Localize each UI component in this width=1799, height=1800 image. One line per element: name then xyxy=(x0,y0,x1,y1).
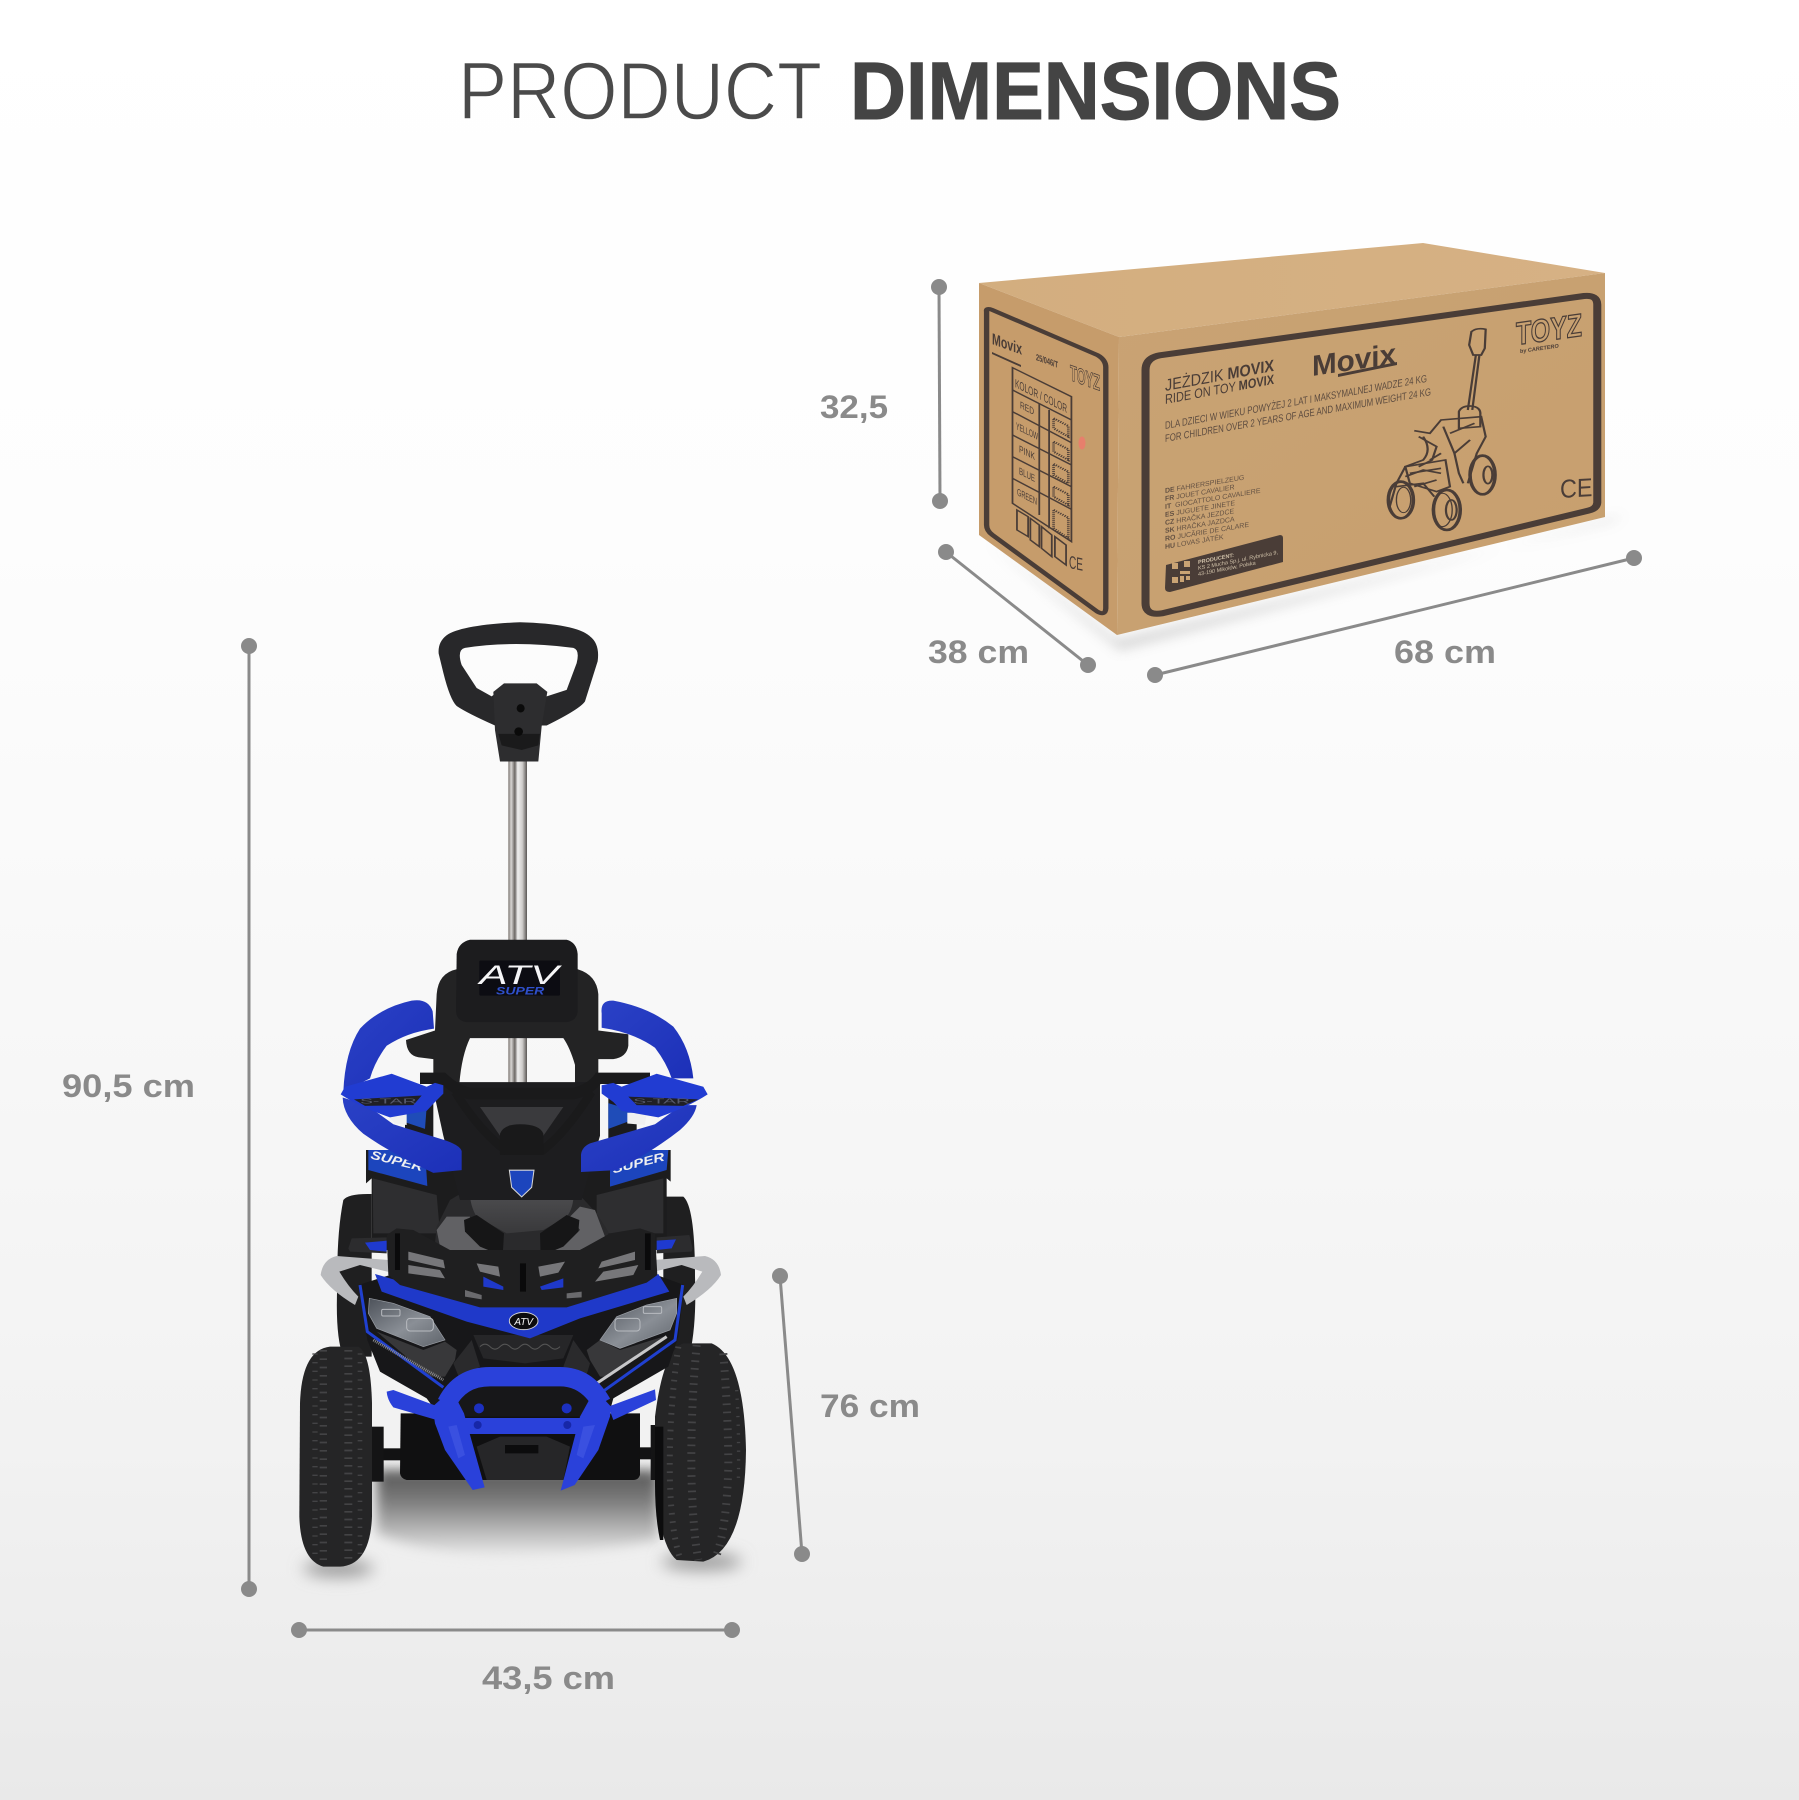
producer plate: 43-190 Mikołów, Polska xyxy=(1198,560,1257,578)
front cargo rack xyxy=(387,1228,657,1307)
seat back frame xyxy=(406,969,628,1084)
dimension: box depth line xyxy=(938,544,1096,673)
blue side trim xyxy=(360,1285,443,1387)
CE mark on box: CE xyxy=(1560,474,1593,504)
blue front bumper xyxy=(387,1377,656,1491)
box shadow xyxy=(985,515,1625,650)
languages list: FR JOUET CAVALIER xyxy=(1165,484,1235,503)
front label heading: FOR CHILDREN OVER 2 YEARS OF AGE AND MAXIMUM WEIGHT 24 KG xyxy=(1165,386,1431,445)
box top face xyxy=(979,243,1605,337)
left hand guard: S-TAR xyxy=(360,1097,417,1106)
central hood xyxy=(433,1150,610,1260)
left face colour table xyxy=(1012,368,1071,565)
ground shadow xyxy=(377,1470,658,1555)
red laser dot xyxy=(1078,436,1086,450)
producer plate xyxy=(1165,535,1283,592)
steel push pole xyxy=(508,761,527,1084)
centre console cap xyxy=(500,1124,543,1155)
rear body panels: SUPER xyxy=(369,1148,425,1174)
rear dark panels behind handlebars xyxy=(387,1082,647,1200)
title xyxy=(458,46,1341,137)
lower chassis xyxy=(372,1413,664,1482)
seat back pad xyxy=(456,940,578,1022)
Toyz logo on box: by CARETERO xyxy=(1520,343,1559,355)
silver side bars xyxy=(321,1235,721,1305)
dimension label: 68 cm: 68 cm xyxy=(1394,634,1496,670)
blue side arcs xyxy=(343,1000,697,1173)
front label heading xyxy=(1165,356,1431,445)
front wheels xyxy=(299,1343,746,1567)
grille xyxy=(473,1335,573,1363)
side label texts: Movix xyxy=(992,330,1023,359)
Toyz logo on box: TOYZ xyxy=(1516,307,1582,352)
right hand guard: S-TAR xyxy=(633,1097,690,1106)
panel: ride-on ATV lower body xyxy=(299,1148,746,1577)
languages list: ES JUGUETE JINETE xyxy=(1165,500,1235,519)
ATV badge xyxy=(509,1312,538,1330)
side label texts: TOYZ xyxy=(1070,360,1100,396)
dimension label: 38 cm: 38 cm xyxy=(928,634,1029,670)
left hand guard xyxy=(341,1074,443,1117)
line art ATV on box xyxy=(1388,329,1495,530)
producer plate: PRODUCENT: xyxy=(1198,553,1234,566)
dimension: box length line xyxy=(1147,550,1642,683)
blue hood band xyxy=(375,1274,669,1338)
dimension label: 32,5: 32,5 xyxy=(820,389,888,425)
languages list: CZ HRAČKA JEZDCE xyxy=(1165,506,1235,527)
dimension label: 90,5 cm: 90,5 cm xyxy=(62,1068,195,1104)
side label texts: KOLOR / COLOR xyxy=(1015,376,1067,416)
title: PRODUCT xyxy=(458,46,822,137)
languages list: DE FAHRERSPIELZEUG xyxy=(1165,475,1244,495)
Movix logo on box: Movix xyxy=(1312,339,1396,383)
panel: shipping box xyxy=(979,243,1625,650)
side label texts: PINK xyxy=(1019,444,1035,463)
rear body panels xyxy=(366,1148,671,1250)
languages list: RO JUCĂRIE DE CALARE xyxy=(1165,520,1249,543)
dimension label: 43,5 cm: 43,5 cm xyxy=(482,1660,615,1696)
dimension: total height line xyxy=(241,638,257,1597)
dimension: length line xyxy=(772,1268,810,1562)
side label texts: GREEN xyxy=(1017,487,1037,508)
front label heading: RIDE ON TOY MOVIX xyxy=(1165,372,1274,407)
side stickers xyxy=(368,1150,427,1186)
rear wheels xyxy=(337,1194,695,1357)
dimension: box height line xyxy=(931,279,948,509)
dimension label: 76 cm: 76 cm xyxy=(820,1388,920,1424)
headlights xyxy=(368,1298,445,1347)
seat back pad: SUPER xyxy=(496,986,545,998)
rear body panels: SUPER xyxy=(611,1150,666,1176)
languages list xyxy=(1165,475,1261,551)
handlebars xyxy=(420,1078,650,1151)
side label texts: YELLOW xyxy=(1016,421,1038,443)
side label texts: RED xyxy=(1020,400,1034,418)
front fascia xyxy=(358,1274,684,1417)
dimension: width line xyxy=(291,1622,740,1638)
languages list: SK HRAČKA JAZDCA xyxy=(1165,514,1235,535)
lower side vents xyxy=(453,1340,590,1380)
front fascia: ATV xyxy=(513,1317,534,1328)
wheel shadows xyxy=(303,1553,742,1577)
box left face xyxy=(979,283,1119,635)
front label heading: JEŻDZIK MOVIX xyxy=(1165,356,1274,395)
languages list: HU LOVAS JÁTÉK xyxy=(1165,532,1224,551)
right hand guard xyxy=(602,1074,708,1117)
box printed frames and line art xyxy=(986,296,1597,614)
seat back pad: ATV xyxy=(476,960,562,990)
push handle xyxy=(439,622,598,761)
box front face xyxy=(1117,273,1605,635)
producer plate: KS 2 Mucha Sp.j. ul. Rybnicka 9, xyxy=(1198,550,1278,572)
side label texts xyxy=(992,330,1100,575)
languages list: IT GIOCATTOLO CAVALIERE xyxy=(1165,488,1261,511)
front label heading: DLA DZIECI W WIEKU POWYŻEJ 2 LAT I MAKSYMALNEJ WADZE 24 KG xyxy=(1165,372,1427,432)
console badge xyxy=(509,1170,534,1197)
side label texts: CE xyxy=(1069,552,1083,575)
side label texts: BLUE xyxy=(1019,466,1035,485)
panel: ride-on ATV upper body and handle xyxy=(341,622,708,1200)
side label texts: 25/046/T xyxy=(1036,352,1058,370)
title: DIMENSIONS xyxy=(850,46,1341,137)
